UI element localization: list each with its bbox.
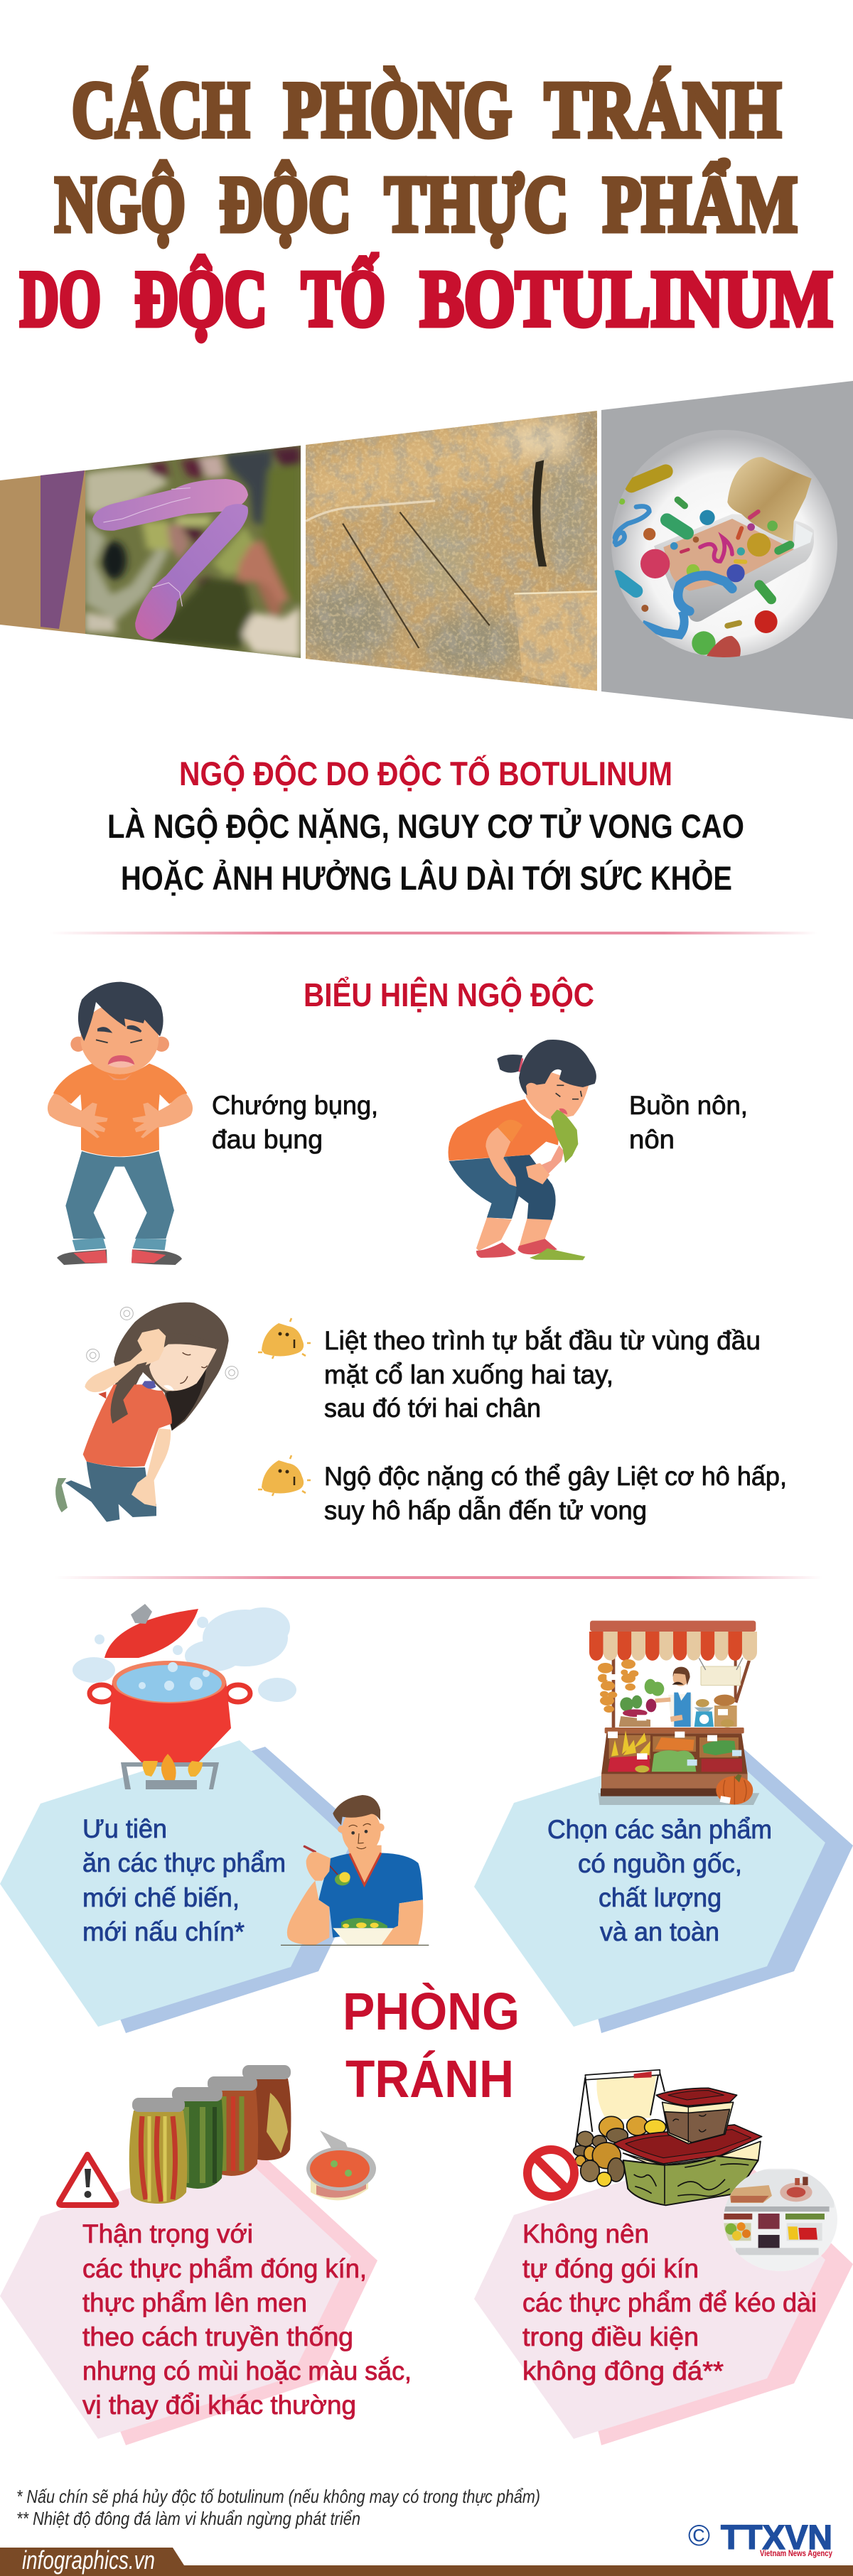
text: bloating: đau bụng — [212, 1125, 323, 1154]
lead statement: LÀ NGỘ ĐỘC NẶNG, NGUY CƠ TỬ VONG CAO — [107, 807, 744, 845]
text: careful with sealed food: các thực phẩm đóng kín, — [82, 2254, 367, 2283]
text: careful with sealed food: nhưng có mùi hoặc màu sắc, — [82, 2356, 412, 2386]
title: ĐỘC — [220, 161, 351, 249]
icon: man eating — [281, 1795, 429, 1946]
title: TRÁNH — [544, 66, 781, 154]
title: NGỘ — [55, 161, 186, 249]
lead statement: NGỘ ĐỘC DO ĐỘC TỐ BOTULINUM — [179, 755, 672, 792]
text: careful with sealed food: vị thay đổi khác thường — [82, 2391, 356, 2420]
text: respiratory failure — [324, 1462, 787, 1525]
text: choose safe products: chất lượng — [599, 1883, 721, 1912]
colour wedge — [0, 470, 85, 634]
icon: open can — [306, 2130, 376, 2200]
icon: boiling pot — [73, 1604, 296, 1789]
text: eat freshly cooked: mới nấu chín* — [82, 1917, 245, 1946]
icon: tin can — [654, 457, 814, 622]
text: do not self-seal — [522, 2219, 817, 2386]
text: respiratory failure: Ngộ độc nặng có thể gây Liệt cơ hô hấp, — [324, 1462, 787, 1491]
text: choose safe products: Chọn các sản phẩm — [547, 1815, 772, 1844]
illustration: dizzy woman — [55, 1303, 238, 1522]
lead statement: HOẶC ẢNH HƯỞNG LÂU DÀI TỚI SỨC KHỎE — [121, 859, 732, 897]
footnotes: ** Nhiệt độ đông đá làm vi khuẩn ngừng phát triển — [16, 2508, 360, 2529]
photo banner — [0, 381, 853, 719]
text: careful with sealed food — [82, 2219, 412, 2420]
heading: prevention: TRÁNH — [345, 2049, 514, 2108]
icon: no sign — [527, 2150, 574, 2197]
hexagon backdrop — [474, 1740, 853, 2033]
text: paralysis: sau đó tới hai chân — [324, 1394, 541, 1423]
text: careful with sealed food: thực phẩm lên men — [82, 2288, 307, 2317]
icon: market stall — [589, 1621, 759, 1805]
text: do not self-seal: tự đóng gói kín — [522, 2254, 699, 2283]
text: nausea — [629, 1091, 748, 1154]
text: bloating: Chướng bụng, — [212, 1091, 378, 1120]
logo: TTXVN: Vietnam News Agency — [760, 2548, 832, 2558]
text: eat freshly cooked: mới chế biến, — [82, 1883, 240, 1912]
illustration: boy with stomach ache — [48, 982, 193, 1265]
text: respiratory failure: suy hô hấp dẫn đến tử vong — [324, 1496, 647, 1525]
panel: eat freshly cooked — [0, 1604, 429, 2033]
text: nausea: Buồn nôn, — [629, 1091, 748, 1120]
illustration: person vomiting — [449, 1040, 596, 1260]
heading: symptoms: BIỂU HIỆN NGỘ ĐỘC — [304, 976, 594, 1013]
hexagon backdrop — [474, 2153, 853, 2445]
footnotes: * Nấu chín sẽ phá hủy độc tố botulinum (nếu không may có trong thực phẩm) — [16, 2486, 540, 2507]
panel: careful with sealed food — [0, 2065, 412, 2445]
text: eat freshly cooked — [82, 1814, 286, 1946]
title — [20, 66, 833, 343]
title: PHÒNG — [284, 66, 512, 154]
text: do not self-seal: các thực phẩm để kéo dài — [522, 2288, 817, 2317]
lead statement — [107, 755, 744, 897]
heading: prevention: PHÒNG — [343, 1982, 520, 2041]
text: paralysis: mặt cổ lan xuống hai tay, — [324, 1360, 613, 1389]
text: do not self-seal: trong điều kiện — [522, 2322, 699, 2351]
text: eat freshly cooked: ăn các thực phẩm — [82, 1848, 286, 1877]
title: CÁCH — [72, 66, 250, 154]
logo: TTXVN: TTXVN — [721, 2519, 832, 2557]
text: choose safe products — [547, 1815, 772, 1946]
icon: bacteria — [615, 471, 790, 659]
footer bar — [0, 2545, 853, 2576]
photo: bacteria micrograph — [85, 443, 302, 661]
icon: pickle jars — [129, 2065, 291, 2204]
icon: germ bullet 1 — [258, 1318, 311, 1359]
icon: fridge — [723, 2167, 839, 2273]
title: TỐ — [301, 254, 385, 343]
icon: germ bullet 2 — [258, 1455, 311, 1496]
text: bloating — [212, 1091, 378, 1154]
title: ĐỘC — [135, 255, 267, 343]
heading: prevention — [343, 1982, 520, 2108]
footnotes — [16, 2486, 540, 2529]
text: choose safe products: có nguồn gốc, — [578, 1849, 742, 1878]
title: PHẨM — [603, 159, 798, 249]
panel: choose safe products — [474, 1621, 853, 2033]
footer bar: infographics.vn — [22, 2545, 155, 2575]
photo: tin can and germs — [611, 430, 837, 659]
text: do not self-seal: Không nên — [522, 2219, 649, 2248]
title: THỰC — [385, 161, 569, 249]
text: careful with sealed food: Thận trọng với — [82, 2219, 253, 2248]
panel: do not self-seal — [474, 2070, 853, 2445]
logo: TTXVN: © — [688, 2518, 710, 2552]
icon: warning sign — [59, 2155, 116, 2205]
photo: fermented fish — [299, 404, 601, 698]
hexagon backdrop — [0, 1740, 379, 2033]
text: paralysis — [324, 1326, 761, 1423]
hexagon backdrop — [0, 2153, 377, 2445]
title: DO — [20, 255, 101, 343]
text: paralysis: Liệt theo trình tự bắt đầu từ vùng đầu — [324, 1326, 761, 1355]
text: nausea: nôn — [629, 1125, 675, 1154]
text: do not self-seal: không đông đá** — [522, 2356, 724, 2386]
text: careful with sealed food: theo cách truyền thống — [82, 2322, 353, 2351]
text: choose safe products: và an toàn — [600, 1917, 719, 1946]
text: eat freshly cooked: Ưu tiên — [82, 1814, 167, 1843]
panel: grey background — [601, 381, 853, 719]
icon: food containers — [574, 2070, 762, 2205]
